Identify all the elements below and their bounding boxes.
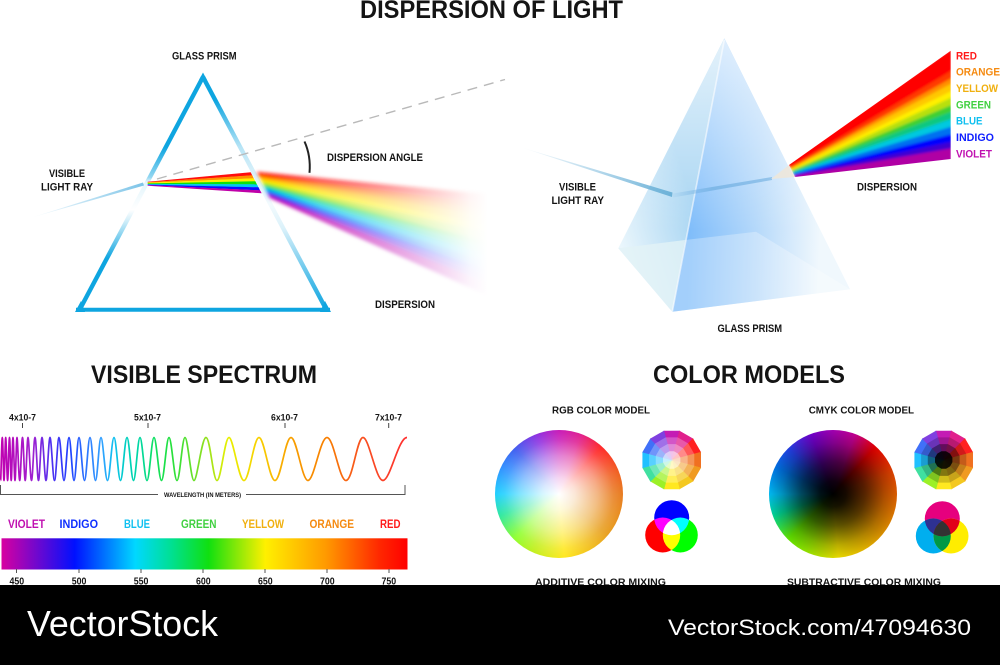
label: subtractive color mixing: SUBTRACTIVE COLOR MIXING	[787, 576, 941, 588]
bracket caption: WAVELENGTH (IN METERS)	[164, 492, 241, 499]
label: dispersion: DISPERSION	[857, 182, 917, 194]
panel: CMYK color model	[769, 404, 973, 588]
nanometer scale: 700	[320, 576, 335, 588]
color name labels	[8, 519, 400, 531]
color name labels: ORANGE	[310, 519, 354, 531]
pyramid glass body	[618, 38, 850, 312]
nanometer scale: 550	[134, 576, 149, 588]
small CMYK segmented wheel	[915, 431, 973, 489]
color name labels: INDIGO	[60, 519, 98, 531]
label: glass prism: GLASS PRISM	[718, 323, 782, 335]
rainbow inside the prism	[148, 172, 262, 193]
footer: VectorStock banner	[0, 585, 1000, 665]
additive mixing circles	[645, 500, 698, 552]
label: additive color mixing: ADDITIVE COLOR MIXING	[535, 576, 666, 588]
panel: 2D triangular prism diagram	[30, 50, 510, 312]
nanometer scale: 600	[196, 576, 211, 588]
color name labels: GREEN	[181, 519, 216, 531]
dashed reference line	[157, 80, 505, 179]
spectrum color labels: RED	[956, 50, 977, 62]
label: dispersion angle: DISPERSION ANGLE	[327, 152, 423, 164]
image URL: VectorStock.com/47094630	[668, 615, 971, 640]
rainbow fan	[787, 48, 952, 179]
VectorStock logo wordmark: VectorStock	[27, 603, 219, 644]
panel: 3D pyramid prism diagram	[520, 38, 1000, 335]
large CMYK color wheel	[769, 430, 897, 558]
heading: color models: COLOR MODELS	[653, 361, 845, 389]
nanometer scale: 750	[382, 576, 397, 588]
prism triangle outline	[75, 72, 331, 312]
gradient bar	[2, 538, 408, 570]
color name labels: RED	[380, 519, 400, 531]
color name labels: BLUE	[124, 519, 150, 531]
outgoing rainbow beam	[250, 160, 510, 312]
color name labels: VIOLET	[8, 519, 45, 531]
spectrum color labels	[956, 50, 1000, 160]
panel: spectrum bar	[2, 519, 408, 588]
label: visible light ray: VISIBLE	[559, 182, 596, 194]
label: visible light ray	[552, 182, 605, 207]
label: visible light ray: LIGHT RAY	[41, 182, 94, 194]
spectrum color labels: BLUE	[956, 116, 982, 128]
label: visible light ray	[41, 168, 94, 194]
wavelength tick labels: 6x10-7	[271, 413, 298, 424]
wavelength tick labels: 7x10-7	[375, 413, 402, 424]
label: glass prism: GLASS PRISM	[172, 50, 236, 62]
small RGB segmented wheel	[643, 431, 701, 489]
incoming visible light ray	[30, 182, 144, 218]
incoming ray	[520, 147, 672, 197]
ray inside the pyramid	[673, 177, 772, 198]
label: visible light ray: VISIBLE	[49, 168, 85, 180]
panel: RGB color model	[495, 404, 701, 588]
label: RGB color model: RGB COLOR MODEL	[552, 404, 651, 416]
nanometer scale: 500	[72, 576, 87, 588]
spectrum color labels: GREEN	[956, 99, 991, 111]
wave with decreasing frequency	[1, 438, 407, 480]
dispersion angle arc	[304, 142, 310, 173]
nanometer scale: 450	[10, 576, 25, 588]
wavelength bracket	[0, 485, 405, 494]
pale rainbow start	[771, 165, 795, 179]
color name labels: YELLOW	[242, 519, 284, 531]
spectrum color labels: VIOLET	[956, 148, 992, 160]
large RGB color wheel	[495, 430, 623, 558]
subtractive mixing circles	[916, 501, 968, 554]
label: dispersion: DISPERSION	[375, 299, 435, 311]
wavelength tick labels: 5x10-7	[134, 413, 161, 424]
wavelength tick labels	[9, 413, 402, 424]
nanometer scale: 650	[258, 576, 273, 588]
wavelength tick labels: 4x10-7	[9, 413, 36, 424]
label: CMYK color model: CMYK COLOR MODEL	[809, 404, 915, 416]
nanometer scale	[10, 576, 397, 588]
heading: visible spectrum: VISIBLE SPECTRUM	[91, 361, 317, 389]
spectrum color labels: INDIGO	[956, 132, 994, 144]
panel: wavelength chart	[0, 413, 407, 499]
label: visible light ray: LIGHT RAY	[552, 195, 605, 207]
